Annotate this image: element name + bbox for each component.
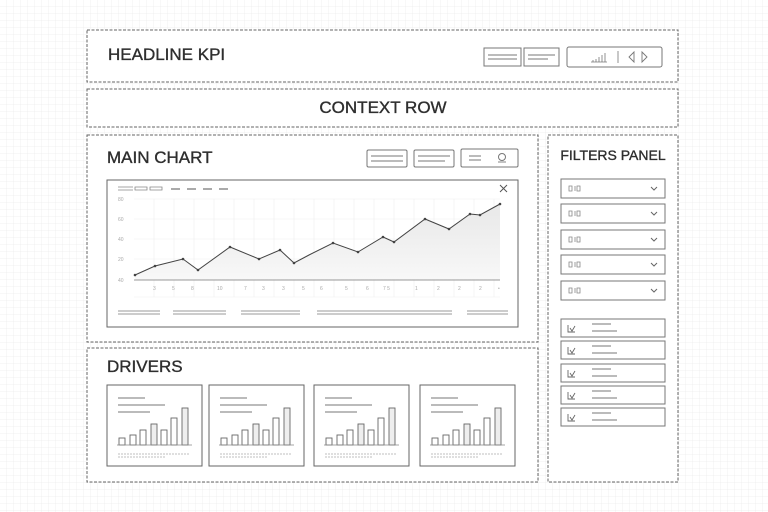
chart: line chart: 3 <box>282 286 285 292</box>
heading: main chart: MAIN CHART <box>107 148 212 167</box>
panel: headline KPI <box>87 30 678 82</box>
panel: drivers <box>87 348 538 482</box>
panel: context row <box>87 89 678 127</box>
chart: line chart: 3 <box>262 286 265 292</box>
card: driver 1 <box>107 385 202 466</box>
buttons: headline controls <box>484 47 662 67</box>
heading: drivers: DRIVERS <box>107 357 183 376</box>
dropdowns <box>561 179 665 300</box>
heading: filters panel: FILTERS PANEL <box>560 147 666 163</box>
checkbox list <box>561 319 665 426</box>
chart: line chart: 20 <box>118 257 124 263</box>
chart: line chart: 60 <box>118 217 124 223</box>
chart: line chart: 40 <box>118 237 124 243</box>
card: driver 2 <box>209 385 304 466</box>
chart: line chart <box>107 180 518 327</box>
chart: line chart: 2 <box>458 286 461 292</box>
chart: line chart: 5 <box>302 286 305 292</box>
chart: line chart: 7 <box>244 286 247 292</box>
chart: line chart: 1 <box>415 286 418 292</box>
chart: line chart: 5 <box>345 286 348 292</box>
card: driver 4 <box>420 385 515 466</box>
buttons: chart controls <box>367 149 518 167</box>
chart: line chart: 5 <box>172 286 175 292</box>
chart: line chart: 6 <box>366 286 369 292</box>
heading: headline KPI: HEADLINE KPI <box>108 45 225 64</box>
panel: filters <box>548 135 678 482</box>
chart: line chart: 2 <box>479 286 482 292</box>
chart: line chart: 10 <box>217 286 223 292</box>
chart: line chart: 80 <box>118 197 124 203</box>
panel: main chart <box>87 135 538 342</box>
chart: line chart: 40 <box>118 278 124 284</box>
card: driver 3 <box>314 385 409 466</box>
chart: line chart: 6 <box>320 286 323 292</box>
chart: line chart: 7 5 <box>383 286 390 292</box>
heading: context row: CONTEXT ROW <box>319 98 447 117</box>
chart: line chart: • <box>498 286 500 292</box>
chart: line chart: 3 <box>153 286 156 292</box>
chart: line chart: 8 <box>191 286 194 292</box>
chart: line chart: 2 <box>437 286 440 292</box>
